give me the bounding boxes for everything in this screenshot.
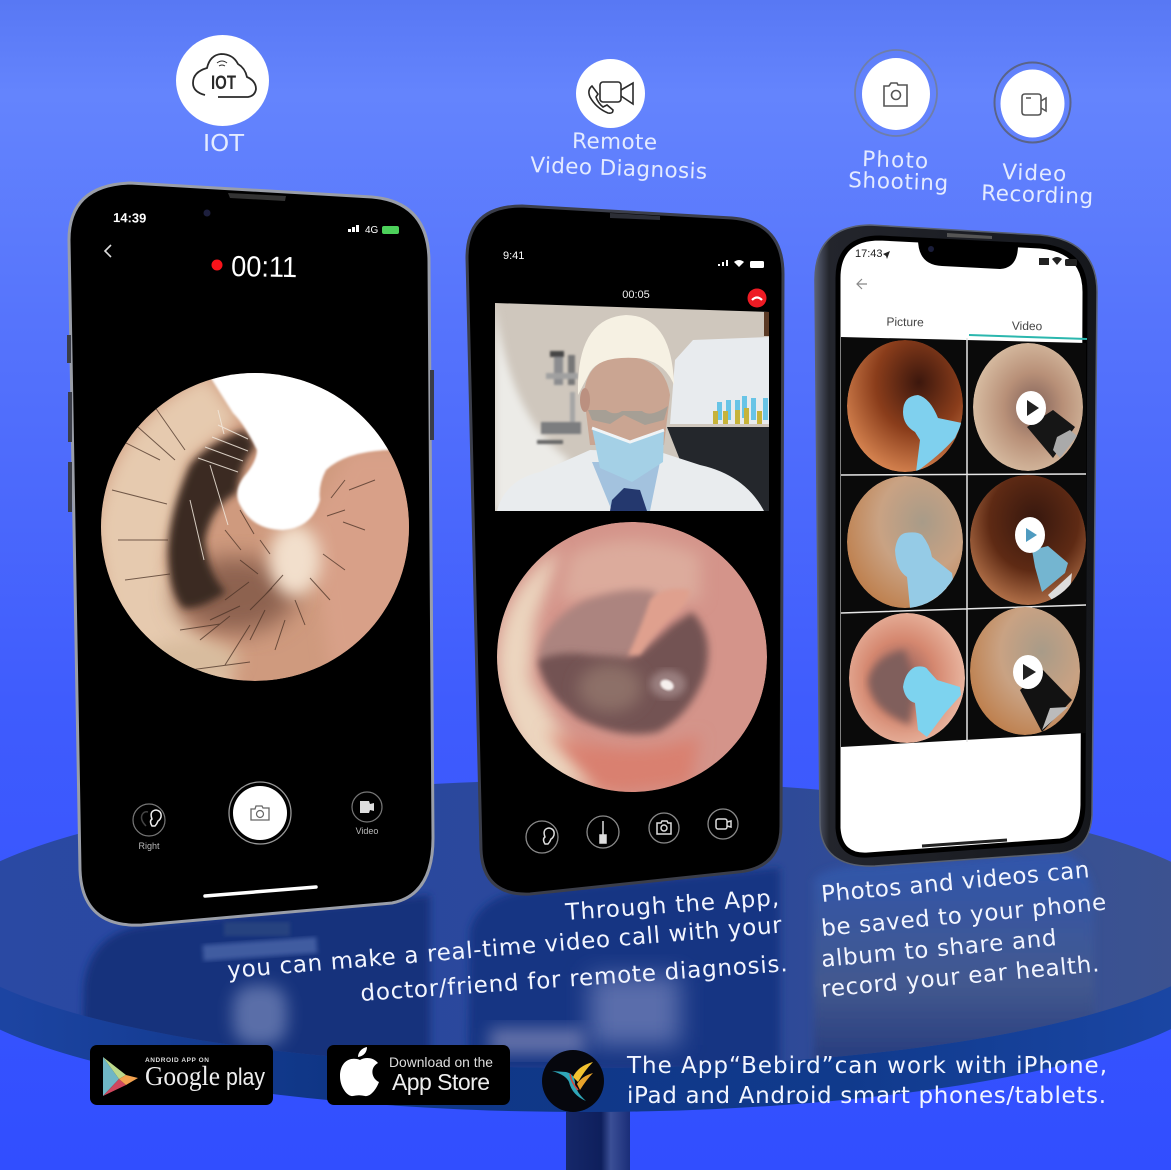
control icons [526,809,738,853]
badge: App Store [327,1045,510,1105]
microscope [537,351,581,444]
icon: IOT cloud: IOT [211,73,236,94]
lab coat [497,450,764,511]
video recording feature [981,62,1094,210]
hang up button [748,288,766,308]
right ear button: Right [138,841,160,851]
test tubes [717,396,768,420]
phone 3: gallery screen [815,225,1097,866]
home indicator [922,840,1007,846]
status bar: 9:41 [503,250,524,262]
caption: saved photos: be saved to your phone [820,890,1107,942]
caption: remote diagnosis: Through the App, [564,885,780,926]
phone 2 body [467,206,783,894]
caption: saved photos: Photos and videos can [820,857,1090,908]
media grid [841,337,1086,747]
IOT heading: IOT [203,131,245,157]
thumbnail 1 [847,340,963,472]
badge: Google Play: ANDROID APP ON [145,1057,209,1064]
caption: saved photos [820,857,1107,1003]
thumbnail 5 [849,613,965,743]
call timer: 00:05 [622,289,650,301]
shutter button [229,782,291,844]
ear drum image [497,522,767,795]
phone 1 body [69,183,433,925]
video recording heading [981,160,1094,210]
status bar: 17:43 [855,248,883,260]
thumbnail 2 [973,343,1083,471]
status bar [855,248,1077,266]
tabs: Picture [886,315,924,329]
icon: play triangle [103,1057,138,1096]
phone 3 body [815,225,1097,866]
glasses [588,406,668,425]
status bar: 14:39 [113,210,146,226]
video button: Video [356,826,378,836]
thumbnail 3 [847,476,965,610]
caption: remote diagnosis [226,885,788,1007]
icon: video camera [994,62,1070,142]
icon: apple [340,1047,379,1096]
status bar [113,210,399,236]
app compatibility text [626,1053,1107,1109]
badge: App Store: Download on the [389,1054,493,1070]
video recording heading: Recording [981,181,1094,210]
play button 4 [1015,517,1045,553]
tabs: Video [1012,319,1043,333]
badge: Google Play [90,1045,273,1105]
badge: App Store: App Store [392,1069,490,1095]
status bar: 4G [365,225,379,236]
icon: video call [576,59,645,128]
notch [918,239,1018,269]
caption: saved photos: record your ear health. [820,951,1100,1003]
play button 6 [1013,655,1043,689]
remote video heading [530,129,708,185]
remote video diagnosis feature [530,59,708,185]
app compatibility text: The App“Bebird”can work with iPhone, [626,1053,1107,1079]
status bar [503,250,764,268]
tabs [886,315,1087,339]
caption: remote diagnosis: you can make a real-time video call with your [226,912,783,984]
video recording heading: Video [1002,160,1067,187]
right ear button [133,804,165,851]
doctor video panel [495,300,770,512]
thumbnail 4 [970,475,1086,605]
photo shooting heading: Shooting [848,168,949,196]
app logo: Bebird hummingbird [542,1050,604,1112]
caption: saved photos: album to share and [820,925,1058,973]
badge: Google Play: Google [145,1061,220,1091]
photo shooting heading [848,147,949,196]
IOT feature [176,35,269,157]
photo shooting heading: Photo [862,147,929,174]
home indicator [205,887,316,896]
head [584,356,670,445]
phone 2: video call screen [467,206,783,894]
remote video heading: Video Diagnosis [530,153,708,185]
caption: remote diagnosis: doctor/friend for remote diagnosis. [360,951,788,1007]
badge: Google Play: play [226,1064,265,1091]
thumbnail 6 [970,607,1080,735]
surgical mask [592,428,664,482]
round table [0,780,1171,1170]
photo shooting feature [848,50,949,196]
video button [352,792,382,836]
icon: camera [855,50,937,136]
white screen [838,238,1085,855]
remote video heading: Remote [572,129,657,155]
recording timer: 00:11 [231,251,297,284]
back arrow [857,279,867,289]
play button 2 [1016,391,1046,425]
ear canal image [101,373,409,681]
back arrow [105,245,111,257]
phone 1: recording screen [67,183,434,925]
app compatibility text: iPad and Android smart phones/tablets. [627,1083,1106,1109]
